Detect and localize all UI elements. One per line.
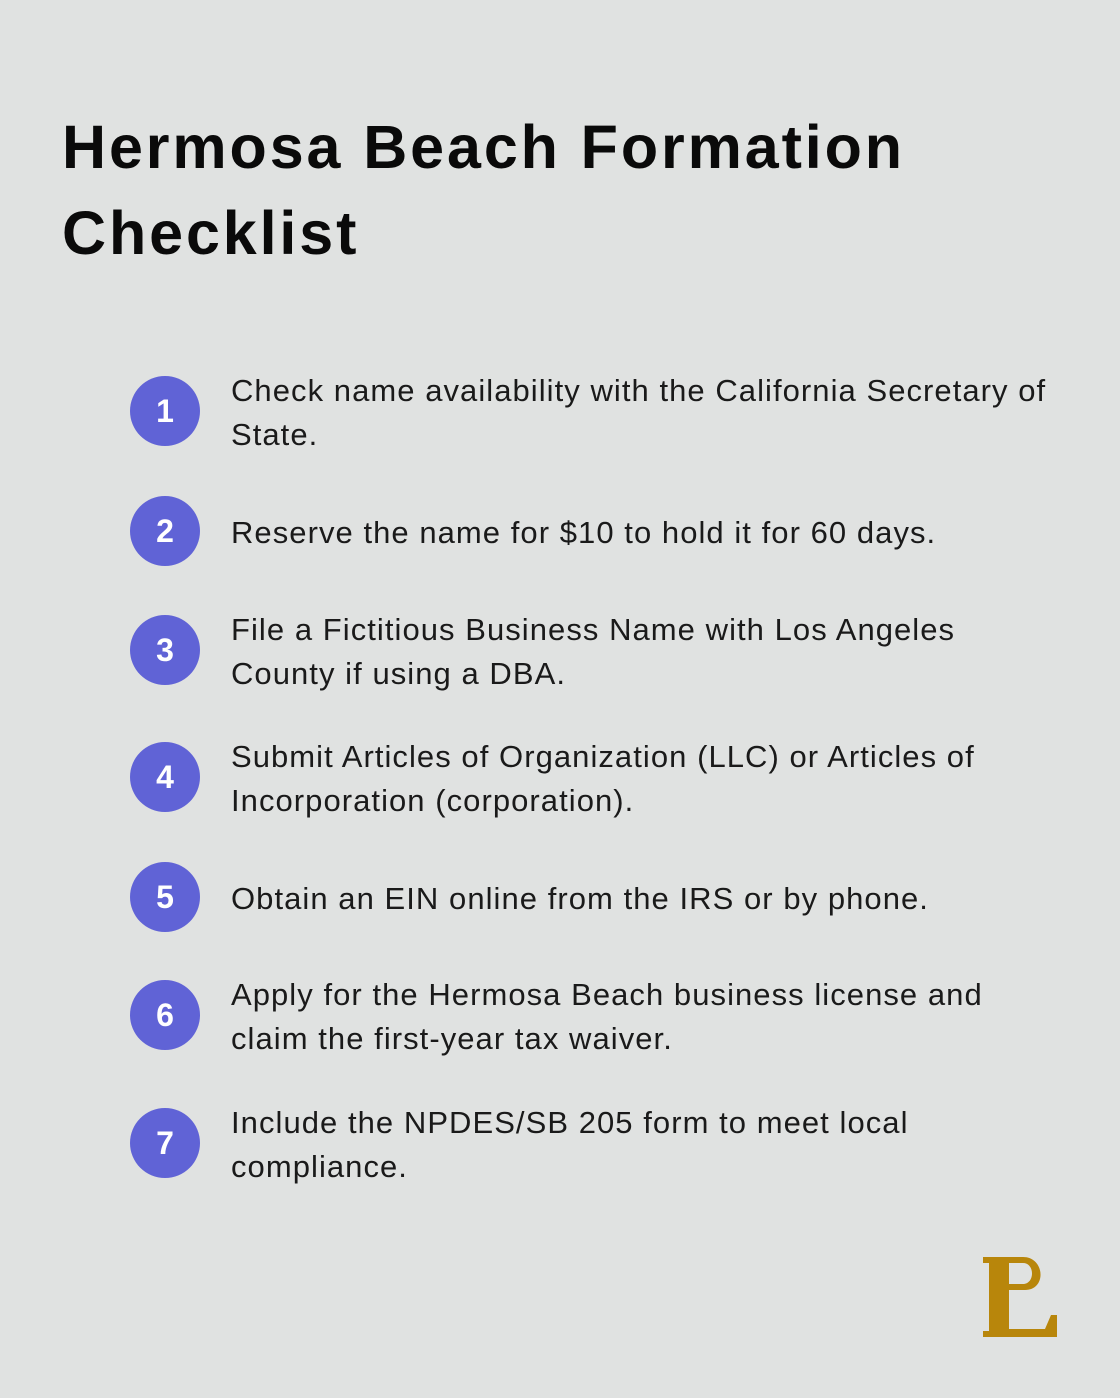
step 4: Submit Articles of Organization (LLC) or Articles of bbox=[231, 739, 975, 774]
step 1: 1 bbox=[156, 392, 174, 428]
step 6: Apply for the Hermosa Beach business license and bbox=[231, 977, 983, 1012]
step 7: 7 bbox=[156, 1124, 174, 1160]
step 7 bbox=[130, 1105, 909, 1184]
step 3: File a Fictitious Business Name with Los Angeles bbox=[231, 612, 955, 647]
step 2: Reserve the name for $10 to hold it for 60 days. bbox=[231, 515, 936, 550]
step 1 bbox=[130, 373, 1046, 452]
step 7: Include the NPDES/SB 205 form to meet local bbox=[231, 1105, 909, 1140]
step 1: State. bbox=[231, 417, 318, 452]
step 5: 5 bbox=[156, 878, 174, 914]
logo bbox=[983, 1257, 1057, 1337]
step 3: County if using a DBA. bbox=[231, 656, 566, 691]
step 1: Check name availability with the California Secretary of bbox=[231, 373, 1046, 408]
step 3 bbox=[130, 612, 955, 691]
step 2 bbox=[130, 496, 936, 566]
title: Hermosa Beach Formation Checklist bbox=[62, 113, 905, 267]
step 3: 3 bbox=[156, 632, 174, 668]
step 5 bbox=[130, 862, 929, 932]
step 4: 4 bbox=[156, 758, 174, 794]
step 6: 6 bbox=[156, 996, 174, 1032]
step 6: claim the first-year tax waiver. bbox=[231, 1021, 673, 1056]
step 7: compliance. bbox=[231, 1149, 408, 1184]
step 6 bbox=[130, 977, 983, 1056]
step 5: Obtain an EIN online from the IRS or by phone. bbox=[231, 881, 929, 916]
step 2: 2 bbox=[156, 512, 174, 548]
step 4 bbox=[130, 739, 975, 818]
step 4: Incorporation (corporation). bbox=[231, 783, 634, 818]
